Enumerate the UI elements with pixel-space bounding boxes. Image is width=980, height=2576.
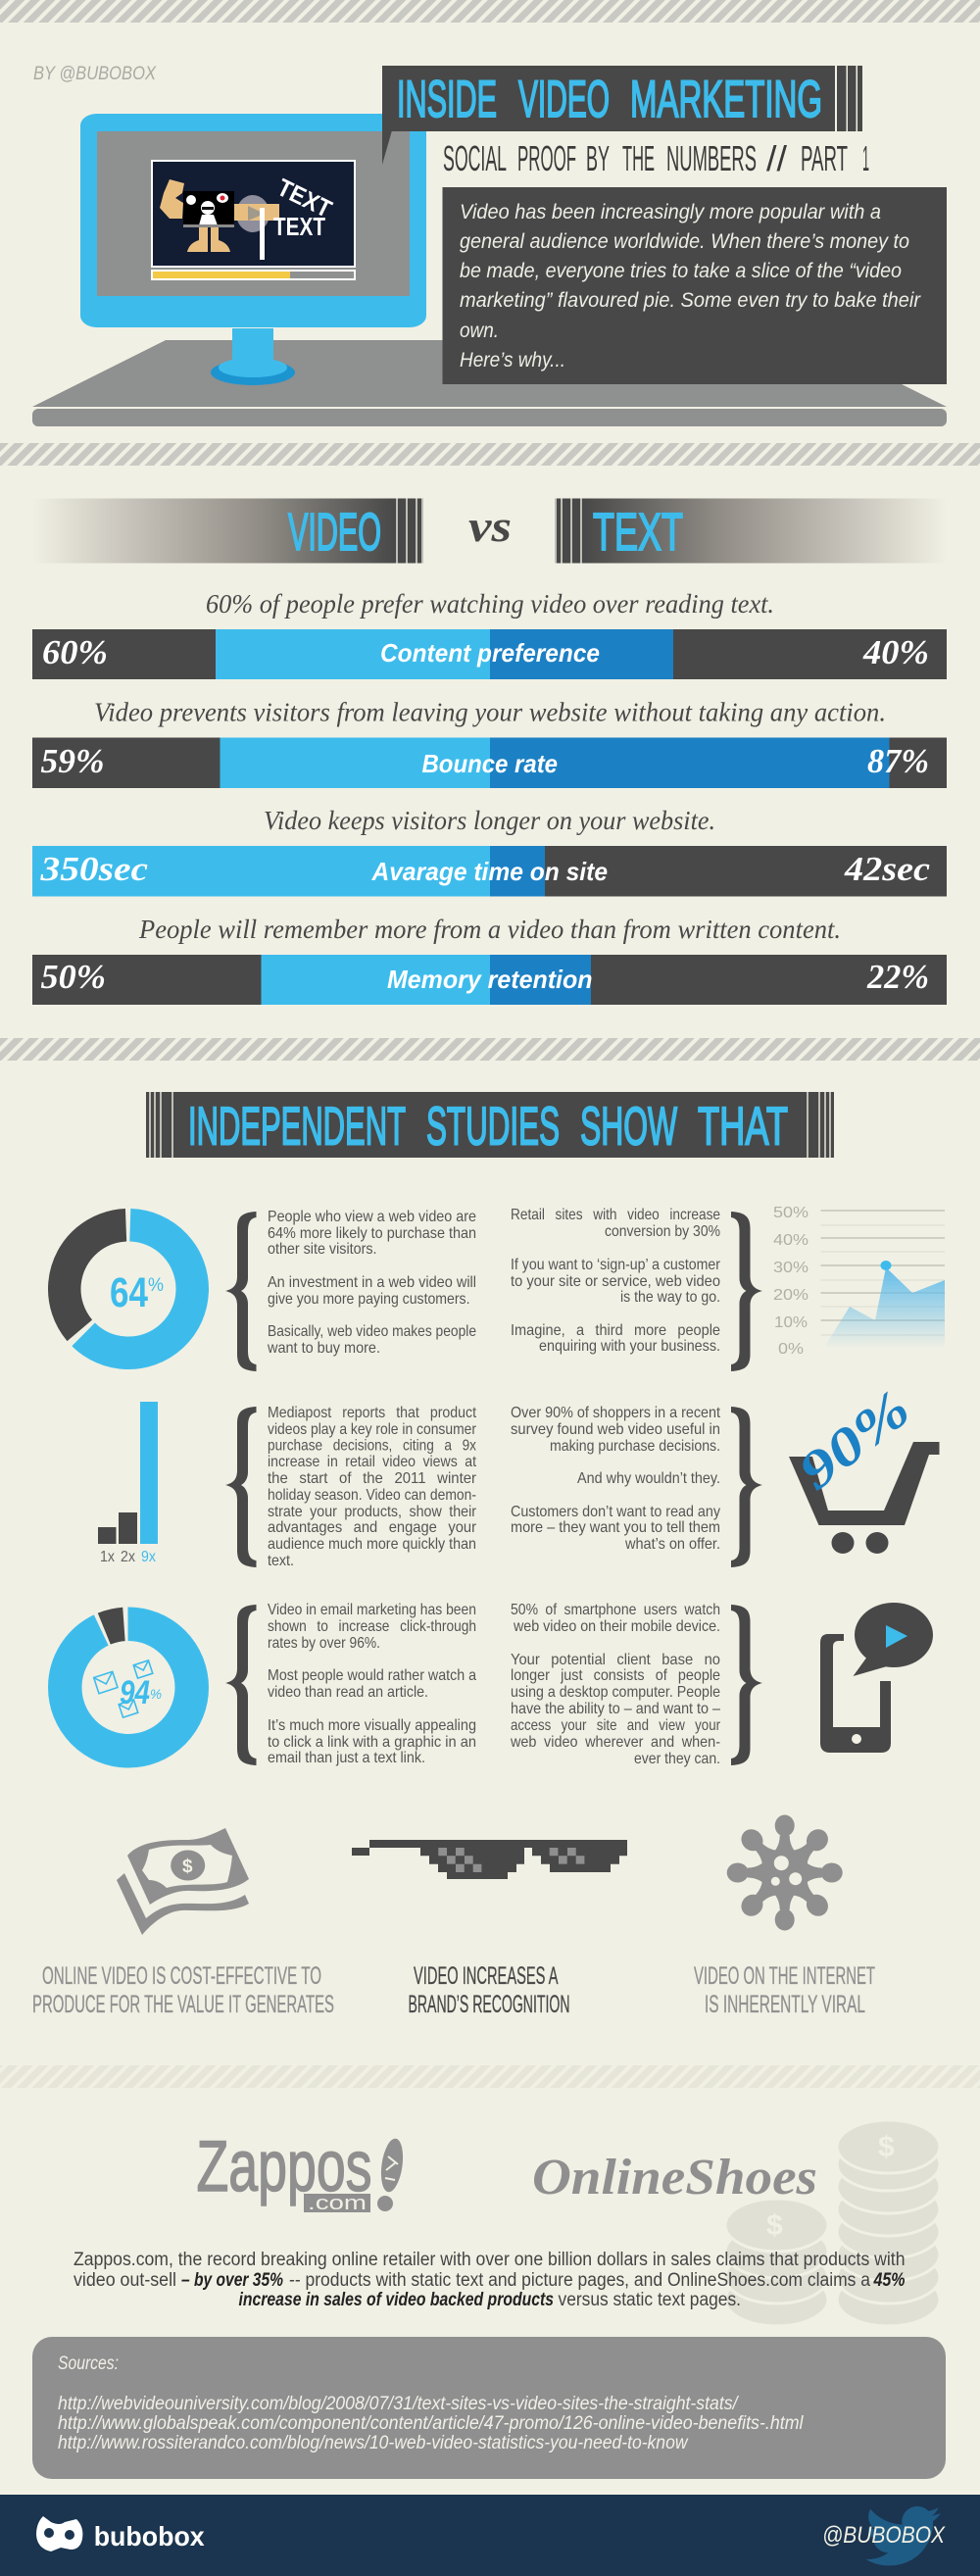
comparison: memory retention: 50% xyxy=(41,958,106,996)
text block: row 2 left xyxy=(268,1405,477,1569)
illustration: desk and monitor xyxy=(32,114,947,426)
comparison: bounce rate: 87% xyxy=(867,742,929,780)
comparison: content preference: 40% xyxy=(862,633,929,671)
monitor frame xyxy=(80,114,426,327)
text block: row 2 left: audience much more quickly than xyxy=(268,1536,476,1553)
benefit: cost-effective: ONLINE VIDEO IS COST-EFFECTIVE TO xyxy=(42,1962,321,1990)
title: INSIDE xyxy=(397,71,497,128)
text block: row 2 left: the start of the 2011 winter xyxy=(268,1470,477,1487)
text block: row 1 left: give you more paying customers. xyxy=(268,1291,470,1308)
monitor stand xyxy=(211,328,295,385)
comparison: memory retention: Memory retention xyxy=(387,965,592,994)
text block: row 3 left xyxy=(268,1602,476,1766)
benefit: brand recognition xyxy=(352,1840,627,2018)
heading: text xyxy=(555,498,947,563)
donut chart: 64% xyxy=(38,1199,219,1379)
text block: row 2 right: making purchase decisions. xyxy=(550,1438,720,1455)
text block: row 3 right: have the ability to – and want to – xyxy=(511,1701,720,1717)
area chart: 20% xyxy=(773,1287,808,1304)
subtitle: THE xyxy=(622,138,655,178)
video thumbnail xyxy=(152,161,355,279)
icon: coin stacks: $ xyxy=(766,2209,783,2242)
paragraph: retailer claims: -- products with static text and picture pages, and OnlineShoes.com claims a xyxy=(289,2270,870,2291)
text block: row 3 right: Your potential client base no xyxy=(511,1652,720,1668)
text label in thumbnail: TEXT xyxy=(273,212,325,241)
icon: shopping cart with 90% xyxy=(787,1379,939,1554)
text block: row 1 left: 64% more likely to purchase than xyxy=(268,1225,476,1242)
donut chart: 64%: % xyxy=(148,1275,164,1296)
benefit: brand recognition: BRAND’S RECOGNITION xyxy=(408,1991,570,2018)
text block: row 2 left: increase in retail video views at xyxy=(268,1454,476,1470)
text block: row 2 left: advantages and engage your xyxy=(268,1519,477,1536)
heading: text: TEXT xyxy=(593,503,683,562)
subtitle: NUMBERS xyxy=(666,138,757,178)
text block: row 3 right: access your site and view your xyxy=(511,1717,721,1734)
intro panel: be made, everyone tries to take a slice of the “video xyxy=(460,260,902,282)
panel: sources: http://www.globalspeak.com/component/content/article/47-promo/126-online-video-benefits-.html xyxy=(58,2413,804,2434)
subtitle: PART xyxy=(801,138,848,178)
comparison: content preference: 60% xyxy=(42,633,108,671)
icons: envelopes xyxy=(94,1660,153,1717)
icon: shopping cart with 90%: 90% xyxy=(787,1379,921,1501)
area chart: 40% xyxy=(773,1232,808,1249)
comparison: average time on site: Video keeps visitors longer on your website. xyxy=(264,806,715,835)
paragraph: retailer claims: video out-sell xyxy=(74,2270,176,2291)
text block: row 1 left: other site visitors. xyxy=(268,1241,376,1258)
left brace: row 3 xyxy=(225,1605,257,1765)
handle: @BUBOBOX xyxy=(822,2522,946,2549)
area chart: 10% xyxy=(774,1314,808,1331)
donut chart: 94%: % xyxy=(150,1686,162,1702)
comparison: bounce rate: Video prevents visitors from leaving your website without taking any action. xyxy=(94,698,886,727)
benefit: viral: IS INHERENTLY VIRAL xyxy=(705,1991,865,2018)
text block: row 2 left: strate your products, show their xyxy=(268,1504,477,1520)
heading: video: VIDEO xyxy=(288,503,381,562)
comparison: memory retention xyxy=(32,915,947,1005)
text block: row 3 left: It’s much more visually appealing xyxy=(268,1717,476,1734)
right brace: row 2 xyxy=(731,1407,762,1567)
text block: row 1 left xyxy=(267,1209,476,1357)
intro panel xyxy=(443,187,947,384)
icon: banknotes: $ xyxy=(182,1857,193,1877)
heading: independent studies: INDEPENDENT xyxy=(188,1096,406,1157)
donut chart: 94%: 94 xyxy=(120,1674,150,1711)
comparison: bounce rate: 59% xyxy=(41,742,104,780)
comparison: bounce rate xyxy=(32,698,947,788)
panel: sources: http://webvideouniversity.com/blog/2008/07/31/text-sites-vs-video-sites-the-straight-stats/ xyxy=(58,2394,739,2414)
icon: virus xyxy=(727,1815,843,1931)
text block: row 3 left: email than just a text link. xyxy=(268,1750,425,1766)
text block: row 2 right: more – they want you to tell them xyxy=(511,1519,720,1536)
text block: row 1 left: Basically, web video makes people xyxy=(268,1323,476,1340)
heading: independent studies: SHOW xyxy=(580,1096,677,1157)
comparison: memory retention: People will remember more from a video than from written content. xyxy=(138,915,841,944)
desk xyxy=(32,340,947,426)
benefit: brand recognition: VIDEO INCREASES A xyxy=(414,1962,559,1990)
text block: row 3 right: ever they can. xyxy=(634,1751,720,1767)
heading: video xyxy=(32,498,423,563)
text label in thumbnail: TEXT xyxy=(272,173,336,223)
text block: row 2 left: holiday season. Video can demon- xyxy=(268,1487,476,1504)
text block: row 1 left: want to buy more. xyxy=(267,1340,380,1357)
donut chart: 64%: 64 xyxy=(110,1269,148,1316)
comparison: memory retention: 22% xyxy=(866,958,929,996)
area chart: 50% xyxy=(773,1205,808,1221)
icon: coin stacks: $ xyxy=(878,2131,895,2163)
text block: row 1 right: If you want to ‘sign-up’ a customer xyxy=(511,1257,721,1273)
intro panel: Video has been increasingly more popular with a xyxy=(460,201,881,223)
intro panel: marketing” flavoured pie. Some even try to bake their xyxy=(460,289,921,312)
text block: row 3 left: video than read an article. xyxy=(268,1684,428,1701)
intro panel: general audience worldwide. When there’s money to xyxy=(460,230,909,253)
benefit: viral xyxy=(694,1815,875,2018)
text block: row 1 right: to your site or service, web video xyxy=(511,1273,720,1290)
left brace: row 1 xyxy=(225,1212,257,1371)
comparison: average time on site: 42sec xyxy=(844,850,930,888)
title banner xyxy=(382,66,862,165)
logo: Zappos: Zappos xyxy=(196,2127,372,2206)
subtitle: BY xyxy=(586,138,610,178)
right brace: row 3 xyxy=(731,1605,762,1765)
subtitle: PROOF xyxy=(517,138,576,178)
text block: row 2 right: And why wouldn’t they. xyxy=(577,1470,720,1487)
text block: row 3 left: Video in email marketing has been xyxy=(268,1602,476,1618)
area chart: 0% xyxy=(778,1341,804,1358)
text block: row 3 right: longer just consists of people xyxy=(511,1667,720,1684)
comparison: content preference: Content preference xyxy=(380,638,600,668)
text block: row 2 right: survey found web video useful in xyxy=(511,1421,720,1438)
text block: row 3 right: web video on their mobile device. xyxy=(513,1618,720,1635)
comparison: content preference: 60% of people prefer watching video over reading text. xyxy=(206,589,774,619)
panel: sources: Sources: xyxy=(58,2353,119,2374)
paragraph: retailer claims: 45% xyxy=(873,2270,906,2291)
area chart xyxy=(773,1205,945,1358)
text block: row 1 right: enquiring with your business. xyxy=(539,1338,720,1355)
benefit: cost-effective xyxy=(32,1828,334,2018)
bar chart: 1x 2x 9x: 2x xyxy=(121,1549,135,1565)
icon: pixel sunglasses xyxy=(352,1840,627,1879)
intro panel: Here’s why... xyxy=(460,349,565,372)
footer xyxy=(0,2495,980,2576)
text block: row 1 right xyxy=(511,1207,721,1355)
panel: sources: http://www.rossiterandco.com/blog/news/10-web-video-statistics-you-need-to-know xyxy=(58,2433,689,2453)
text block: row 3 right: 50% of smartphone users watch xyxy=(511,1602,720,1618)
donut chart: 94% xyxy=(46,1605,211,1770)
vs: vs xyxy=(468,501,512,551)
heading: independent studies: THAT xyxy=(698,1096,788,1157)
comparison: average time on site xyxy=(32,806,947,896)
text block: row 3 left: to click a link with a graphic in an xyxy=(268,1734,476,1751)
logo: owl xyxy=(36,2516,82,2551)
byline: BY @BUBOBOX xyxy=(33,64,157,84)
title xyxy=(397,71,822,128)
heading: independent studies: STUDIES xyxy=(426,1096,560,1157)
text: 1 xyxy=(862,138,869,178)
text block: row 1 right: is the way to go. xyxy=(620,1289,720,1306)
text block: row 2 left: Mediapost reports that product xyxy=(268,1405,476,1421)
intro panel: own. xyxy=(460,320,499,342)
title: MARKETING xyxy=(630,71,822,128)
text block: row 1 left: People who view a web video are xyxy=(268,1209,476,1225)
icon: twitter bird xyxy=(865,2506,941,2565)
paragraph: retailer claims: versus static text pages. xyxy=(559,2290,741,2310)
text block: row 2 left: purchase decisions, citing a 9x xyxy=(268,1437,476,1455)
logo: Zappos: .com xyxy=(308,2193,367,2214)
panel: sources xyxy=(32,2337,946,2479)
icon: coin stacks xyxy=(725,2120,940,2326)
paragraph: retailer claims: – by over 35% xyxy=(181,2270,283,2291)
text block: row 3 right xyxy=(510,1602,721,1767)
comparison: average time on site: Avarage time on site xyxy=(371,857,608,886)
wordmark: bubobox xyxy=(94,2521,205,2551)
left brace: row 2 xyxy=(225,1407,257,1567)
text block: row 3 right: web video wherever and when- xyxy=(510,1734,720,1751)
text block: row 1 right: conversion by 30% xyxy=(605,1223,720,1240)
text block: row 1 left: An investment in a web video will xyxy=(268,1274,476,1291)
text block: row 3 left: rates by over 96%. xyxy=(268,1635,380,1652)
text block: row 3 left: Most people would rather watch a xyxy=(268,1667,476,1684)
text block: row 3 right: using a desktop computer. People xyxy=(511,1684,720,1701)
bar chart: 1x 2x 9x: 9x xyxy=(141,1549,156,1565)
paragraph: retailer claims xyxy=(74,2250,906,2310)
icon: phone with play bubble xyxy=(820,1603,933,1753)
icon: banknotes xyxy=(117,1828,249,1935)
title: VIDEO xyxy=(518,71,610,128)
logo: OnlineShoes: OnlineShoes xyxy=(532,2150,817,2205)
text block: row 1 right: Retail sites with video increase xyxy=(511,1207,720,1223)
subtitle: SOCIAL xyxy=(443,138,507,178)
text block: row 2 right: Over 90% of shoppers in a recent xyxy=(511,1405,720,1421)
bar chart: 1x 2x 9x xyxy=(98,1402,158,1565)
subtitle xyxy=(443,138,869,178)
text block: row 2 left: videos play a key role in consumer xyxy=(268,1421,477,1438)
heading: independent studies xyxy=(146,1092,834,1158)
right brace: row 1 xyxy=(731,1212,762,1371)
text block: row 2 right: Customers don’t want to read any xyxy=(511,1504,720,1520)
benefit: cost-effective: PRODUCE FOR THE VALUE IT GENERATES xyxy=(32,1991,334,2018)
comparison: bounce rate: Bounce rate xyxy=(421,749,558,778)
text block: row 3 left: shown to increase click-through xyxy=(268,1618,476,1635)
area chart: 30% xyxy=(773,1260,808,1276)
paragraph: retailer claims: increase in sales of video backed products xyxy=(239,2290,554,2310)
text block: row 1 right: Imagine, a third more people xyxy=(511,1322,720,1339)
paragraph: retailer claims: Zappos.com, the record breaking online retailer with over one billion dollars in sales claims that products with xyxy=(74,2250,906,2270)
monitor screen xyxy=(97,131,410,296)
subtitle: // xyxy=(766,138,787,178)
text block: row 2 right: what’s on offer. xyxy=(624,1536,720,1553)
comparison: content preference xyxy=(32,589,947,679)
text block: row 2 left: text. xyxy=(268,1553,294,1569)
bar chart: 1x 2x 9x: 1x xyxy=(100,1549,115,1565)
comparison: average time on site: 350sec xyxy=(39,850,149,888)
text block: row 2 right xyxy=(511,1405,720,1553)
